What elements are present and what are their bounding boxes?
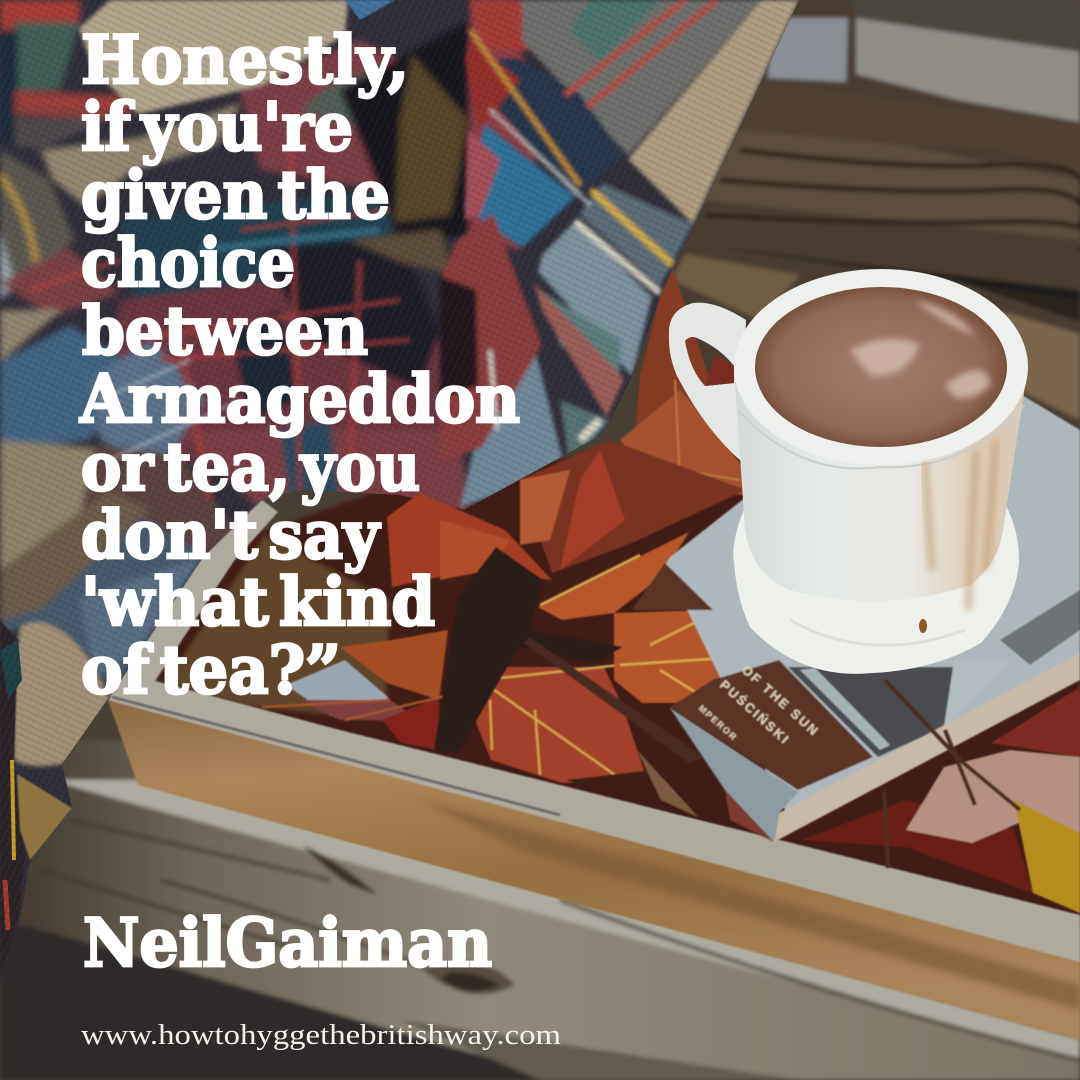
top orange leaf: [538, 532, 689, 620]
quote text: [79, 21, 520, 709]
drip drop: [919, 619, 927, 633]
book page side: [670, 708, 798, 842]
book photo panel: [788, 667, 953, 757]
foot shadow curve: [790, 620, 965, 645]
bark twig: [524, 637, 703, 763]
mug body: [734, 367, 1028, 601]
orange leaf with veins: [614, 610, 788, 703]
reddish shadow: [300, 700, 420, 720]
quote text: or tea, you: [81, 428, 420, 506]
plaid: right section: [440, 0, 799, 507]
mug handle: [669, 303, 746, 462]
author name: NeilGaiman: [83, 904, 492, 982]
dark red leaf: [802, 800, 1033, 893]
quote text: 'what kind: [81, 563, 435, 641]
tray inner cardboard: [165, 535, 390, 720]
mug rim: [734, 269, 1028, 465]
blanket fringe tan section: [79, 0, 348, 114]
thin stems: [262, 690, 470, 720]
tray rim and brown side band: [108, 500, 1080, 1040]
plaid: thin stripes: [20, 100, 410, 500]
blanket lower-left bulge: [13, 622, 113, 766]
rim grey: [108, 500, 1080, 965]
autumn leaves: [262, 269, 788, 827]
dead leaf: [637, 750, 698, 817]
book: PUŚCIŃSKI: [717, 677, 793, 748]
quote text: Armageddon: [79, 360, 520, 438]
quote text: of tea?”: [81, 631, 341, 709]
lower left orange leaf: [340, 630, 448, 700]
twigs: [884, 680, 1020, 868]
dark red small leaf: [382, 697, 439, 750]
paper under leaves: [286, 660, 389, 716]
bark pile: [434, 547, 623, 753]
red top right leaf: [991, 687, 1080, 757]
leaf behind mug: [628, 269, 746, 517]
website url: www.howtohyggethebritishway.com: [81, 1019, 561, 1051]
coffee drips: [925, 440, 996, 610]
bottom-right leaves and twigs: [802, 680, 1080, 913]
book cream edge: [774, 653, 1080, 842]
book: MPEROR: [697, 703, 739, 743]
book title text: OF THE SUN: [739, 662, 822, 739]
knit texture: [0, 0, 800, 1000]
book cover: [665, 395, 1080, 810]
cocoa foam: [850, 300, 990, 398]
plaid blanket: [0, 0, 800, 1000]
handle hole view: [705, 354, 734, 386]
quote text: choice: [81, 224, 295, 302]
hot chocolate mug: [669, 269, 1028, 674]
left red leaf: [387, 493, 552, 587]
photo background: wooden crate top right: [640, 0, 1080, 440]
plaid: left section: [0, 0, 540, 693]
cocoa surface: [755, 287, 1007, 447]
quote text: Honestly,: [81, 21, 409, 99]
rim underside shadow: [738, 405, 1024, 469]
dark groove: [112, 697, 560, 815]
quote text: between: [82, 292, 368, 370]
book: [632, 395, 1080, 842]
quote text: don't say: [81, 496, 381, 574]
photo background: weathered wood lower area: [0, 740, 1080, 1080]
dark under-leaf: [566, 770, 731, 827]
upper middle leaves: [519, 440, 746, 573]
book brown cover: [670, 660, 873, 790]
quote text: given the: [81, 156, 390, 234]
large red leaf: [467, 667, 647, 783]
blanket fringe ochre: [17, 774, 72, 860]
mug foot: [733, 500, 1019, 674]
brown band: [108, 700, 1080, 1040]
quote text: if you're: [81, 88, 353, 166]
book brown spine upper: [632, 563, 713, 610]
blanket left edge stripe: [0, 620, 25, 980]
yellow leaf: [1014, 800, 1080, 913]
tray interior base: [155, 430, 1080, 925]
blanket tan fold: [41, 103, 241, 207]
pink leaf: [906, 750, 1080, 843]
